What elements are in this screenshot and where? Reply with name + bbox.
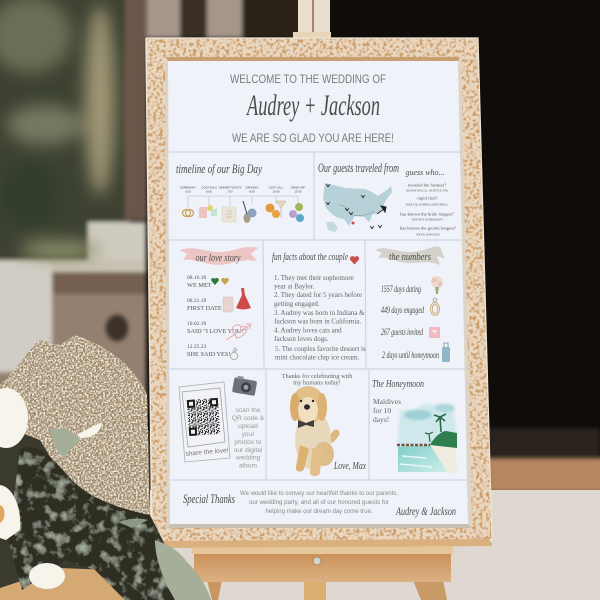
dark foliage [8, 447, 175, 600]
timeline connector [188, 196, 298, 208]
QR instructions: wedding [235, 454, 261, 462]
fun facts list: Jackson was born in California. [274, 318, 361, 326]
ornate gold frame [146, 38, 492, 548]
timeline labels: 5:00 [185, 190, 191, 194]
timeline labels: DANCING [246, 186, 258, 190]
guess who list: has known the bride longest? [400, 212, 454, 216]
ribbon: pink [180, 247, 258, 265]
panel: our love story: 12.25.23 [187, 344, 206, 350]
icon: camera [232, 375, 258, 396]
fun facts list: 5. The couples favorite dessert is [275, 346, 366, 353]
flower centre [0, 505, 4, 523]
sage leaves [50, 429, 211, 600]
timeline labels: 7:00 [227, 190, 233, 194]
QR instructions: photos to [234, 439, 262, 446]
panel: title: WELCOME TO THE WEDDING OF [230, 72, 386, 86]
easel [192, 0, 453, 600]
panel: our love story: 10.02.18 [187, 321, 206, 327]
panel: dog thank-you: my humans today! [293, 380, 341, 386]
QR instructions: scan the [236, 407, 261, 414]
panel: our love story: FIRST DATE [187, 305, 222, 312]
panel: the numbers: 449 days engaged [381, 306, 424, 316]
panel dividers [169, 152, 467, 480]
panel: honeymoon: days! [373, 415, 389, 424]
panel: dog thank-you: Love, Max [333, 460, 366, 472]
QR instructions: our digital [234, 447, 263, 454]
panel: our love story: SHE SAID YES! [187, 351, 230, 358]
icon: hearts [211, 278, 229, 285]
guess who list: cupid first? [417, 196, 437, 200]
icon: drink and dress [223, 288, 251, 312]
icon: envelope [429, 327, 440, 338]
icon: diamond ring [230, 348, 238, 360]
polaroid with QR: share the love! [185, 447, 229, 458]
panel: special thanks: our wedding party, and all of our honored guests for [249, 499, 389, 506]
panel: our love story: 08.16.18 [187, 275, 206, 281]
panel: special thanks: Audrey & Jackson [395, 504, 456, 518]
icon: heart arrow [226, 324, 251, 340]
guess who list: ADAM WELLS, SEATTLE WA [406, 188, 449, 194]
panel: title: WE ARE SO GLAD YOU ARE HERE! [232, 131, 394, 145]
panel: the numbers: 1557 days dating [381, 285, 421, 295]
panel: our love story: 08.21.18 [187, 298, 206, 304]
illustration: dog [290, 386, 340, 476]
panel: timeline [176, 161, 305, 223]
pot [0, 568, 132, 600]
ribbon: grey [375, 247, 445, 265]
guess who list: TIFFANY ANDERSON [411, 218, 443, 222]
timeline labels: 10:30 [294, 190, 302, 194]
icon: rings [182, 210, 194, 216]
floral arrangement [0, 335, 211, 600]
fun facts list: year at Baylor. [274, 284, 315, 290]
fun facts list: 4. Audrey loves cats and [274, 328, 342, 334]
fun facts list: mint chocolate chip ice cream. [275, 354, 360, 362]
panel: honeymoon [372, 378, 457, 473]
sign paper [168, 61, 468, 524]
illustration: beach watercolor [397, 404, 457, 473]
panel: qr code [179, 375, 265, 470]
panel: title [230, 72, 394, 145]
icon: guitar and disco ball [243, 201, 256, 223]
timeline labels: 10:00 [272, 190, 280, 194]
panel: title: Audrey + Jackson [246, 89, 380, 122]
QR instructions [232, 407, 265, 470]
timeline labels: SEND-OFF [291, 186, 305, 190]
panel: honeymoon: The Honeymoon [372, 378, 424, 390]
panel: the numbers: 2 days until honeymoon [382, 351, 439, 361]
panel: special thanks [183, 490, 456, 518]
guess who list [400, 168, 456, 236]
panel: honeymoon: Maldives [373, 397, 401, 406]
panel: fun facts [272, 251, 366, 362]
panel: dog thank-you [282, 373, 366, 476]
timeline labels: CEREMONY [180, 186, 196, 190]
icon: suitcase [442, 343, 450, 362]
timeline labels: LAST CALL [269, 186, 284, 190]
panel: special thanks: helping make our dream day come true. [266, 508, 373, 515]
panel: our love story: SAID "I LOVE YOU!" [187, 328, 246, 335]
fun facts list: 1. They met their sophomore [274, 275, 354, 282]
panel: timeline: timeline of our Big Day [176, 161, 262, 176]
panel: our love story: our love story [196, 253, 241, 264]
panel: the numbers [375, 247, 450, 362]
panel: the numbers: 267 guests invited [381, 328, 423, 338]
icon: champagne and glasses [266, 201, 286, 218]
map of the USA [323, 183, 392, 232]
icon: cocktails [199, 205, 217, 218]
panel: special thanks: We would like to convey our heartfelt thanks to our parents, [240, 490, 398, 497]
timeline labels: COCKTAILS [201, 186, 217, 190]
white petals [0, 388, 102, 589]
guess who list: guess who... [405, 168, 445, 177]
guess who list: MATT & ANDREA MITCHELL [406, 202, 448, 206]
QR instructions: your [242, 431, 255, 438]
QR instructions: QR code & [232, 415, 265, 422]
icon: red heart [350, 256, 359, 264]
panel: dog thank-you: Thanks for celebrating with [282, 373, 353, 380]
fun facts list: getting engaged. [274, 301, 320, 308]
panel: fun facts: fun facts about the couple [272, 251, 348, 263]
panel: special thanks: Special Thanks [183, 491, 235, 506]
timeline labels: 8:30 [249, 190, 255, 194]
icon: send-off flowers [289, 203, 304, 222]
fun facts list [274, 275, 366, 362]
fun facts list: 3. Audrey was born in Indiana & [274, 310, 365, 317]
foliage base [0, 430, 150, 600]
guess who list: has known the groom longest? [400, 226, 456, 230]
icon: menu card [222, 207, 236, 222]
panel: our love story: WE MET [187, 282, 212, 289]
guess who list: traveled the farthest? [408, 182, 446, 188]
icon: ring pair [430, 298, 440, 316]
baby's breath [0, 335, 150, 520]
guess who list: RYAN DAWSON [416, 232, 440, 236]
QR instructions: upload [238, 423, 258, 430]
fun facts list: 2. They dated for 5 years before [274, 292, 362, 299]
timeline labels: DINNER/TOASTS [219, 186, 241, 190]
fun facts list: Jackson loves dogs. [274, 336, 329, 343]
panel: our love story [180, 247, 258, 360]
panel: guests traveled [318, 160, 456, 236]
panel: guests traveled: Our guests traveled from [318, 160, 399, 175]
qr code [187, 398, 220, 436]
timeline labels [180, 186, 305, 194]
timeline labels: 6:00 [206, 190, 212, 194]
QR instructions: album [239, 462, 257, 470]
panel: honeymoon: for 10 [373, 406, 391, 415]
panel: the numbers: the numbers [389, 252, 431, 263]
icon: bouquet [431, 276, 443, 294]
